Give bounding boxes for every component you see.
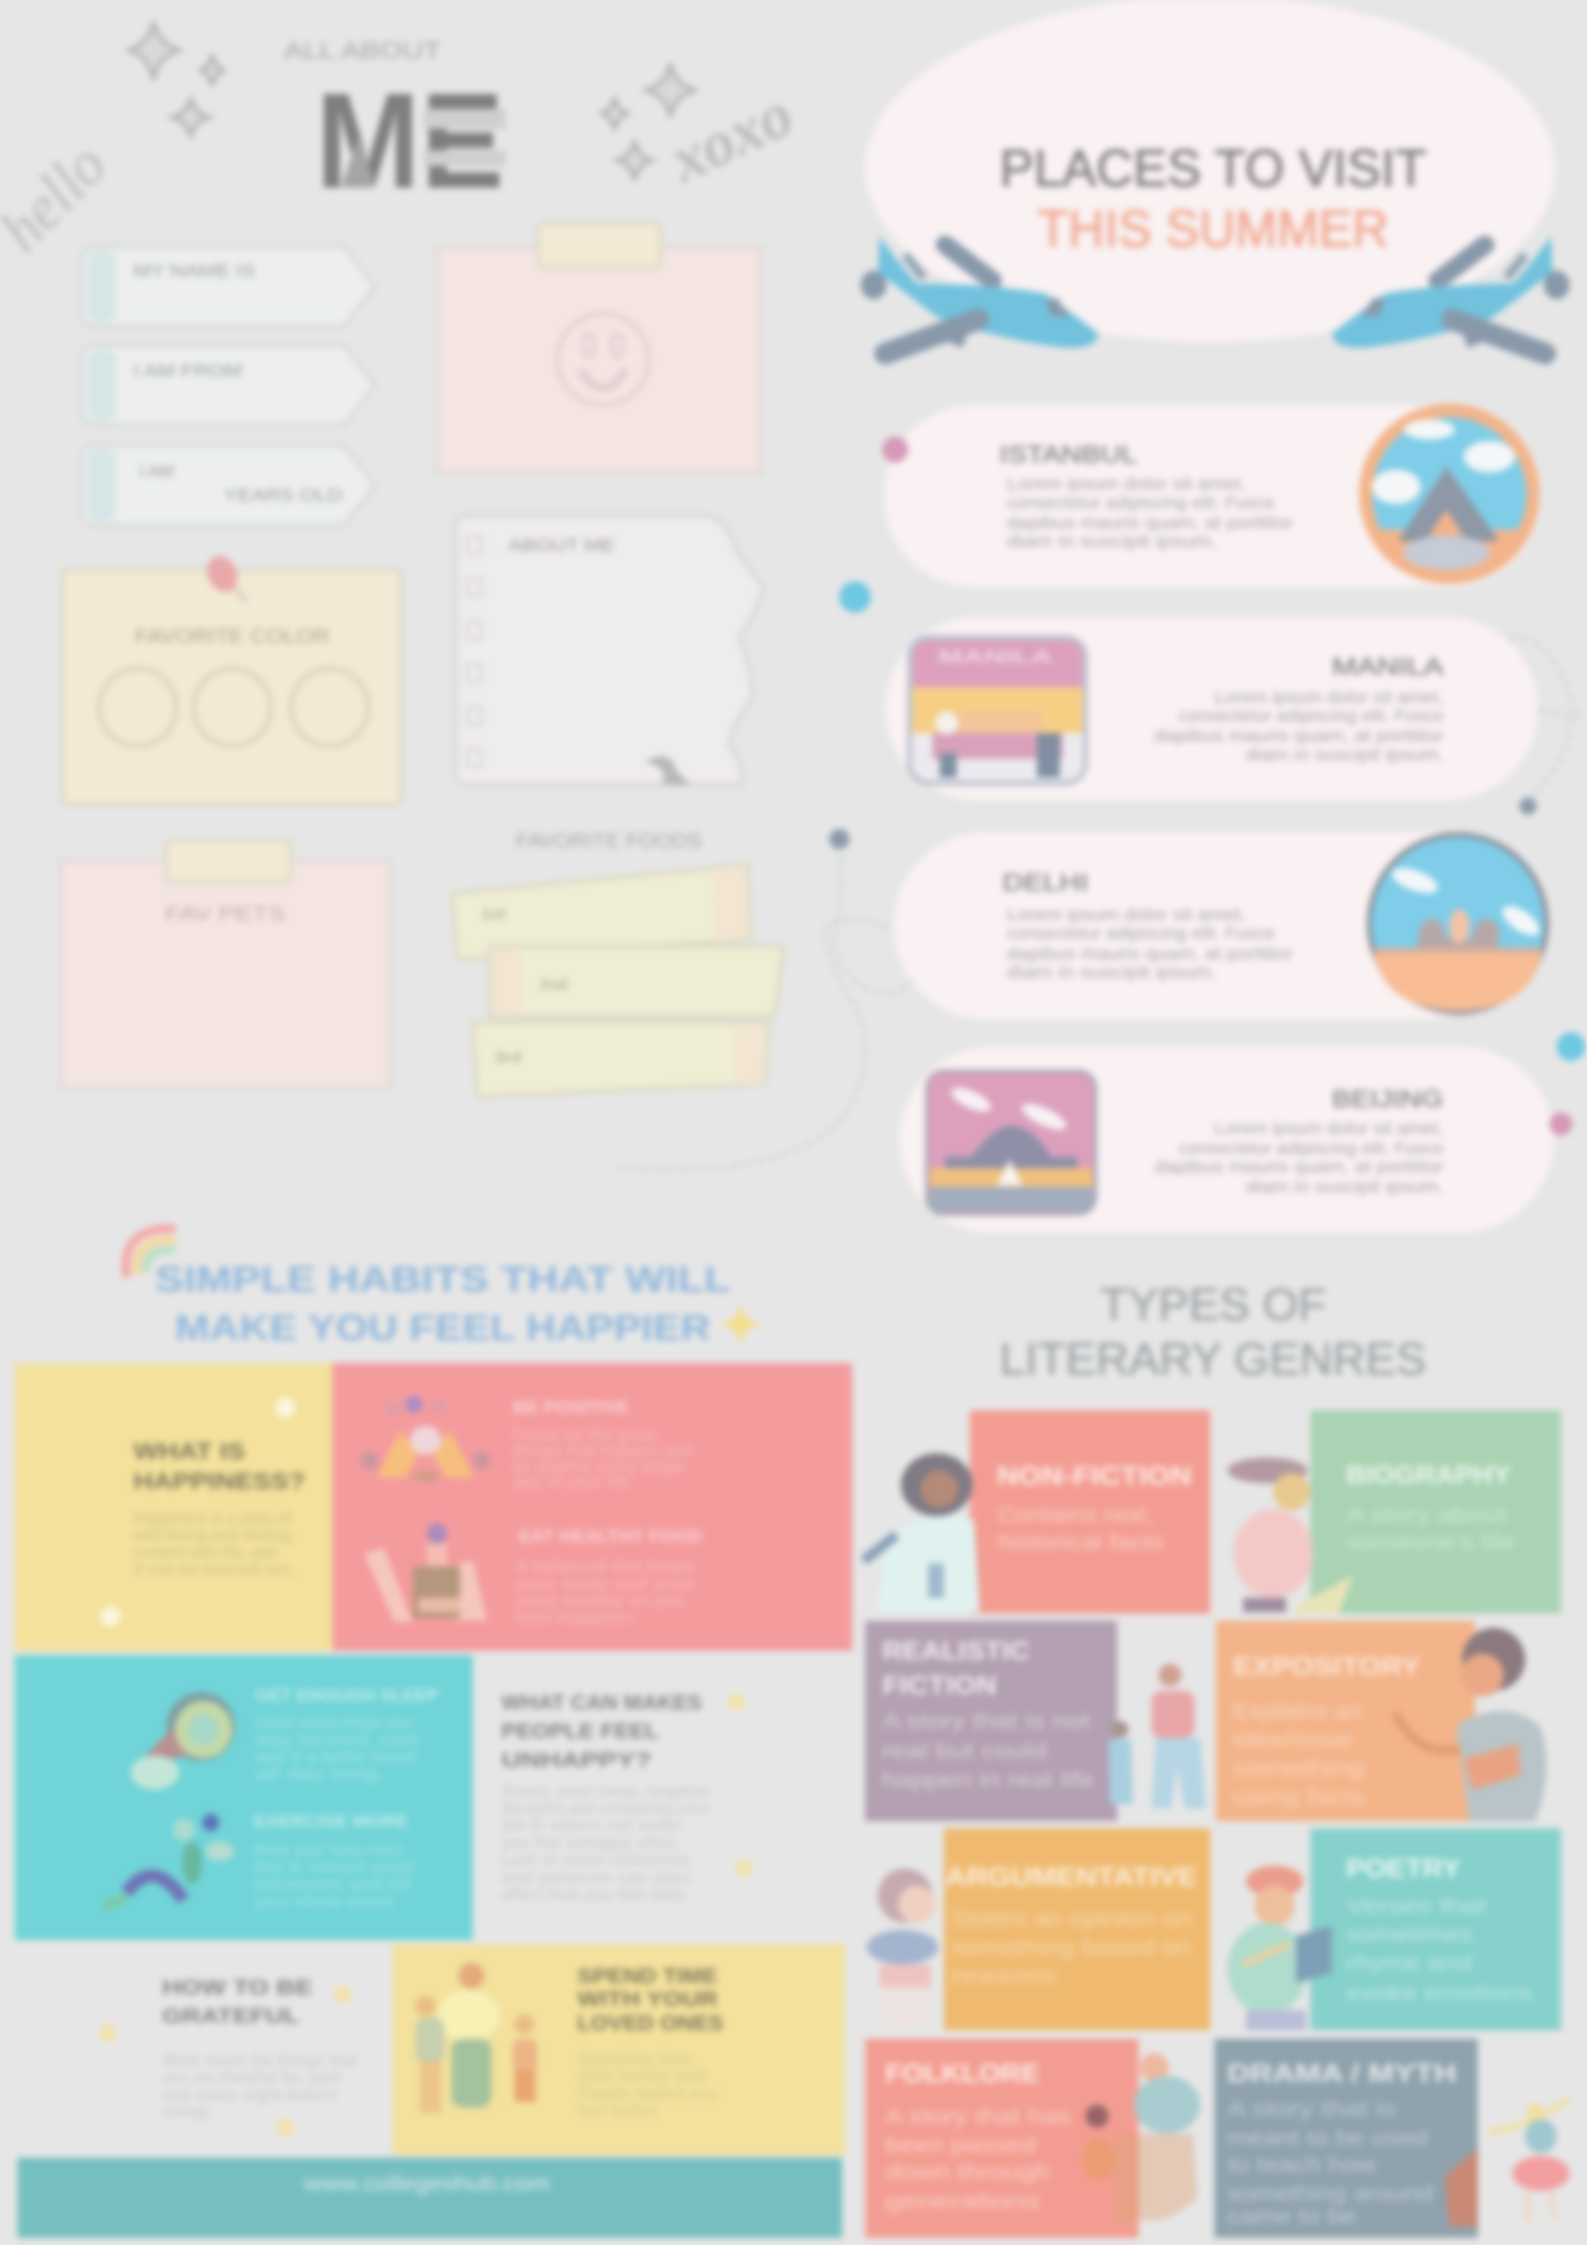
body text: Lorem ipsum dolor sit amet,: [1007, 474, 1246, 494]
panel: sleep and exercise: [15, 1655, 473, 1940]
body text: [1007, 905, 1293, 982]
body text: Lack of social connection: [501, 1850, 690, 1870]
card: folklore: [865, 2039, 1200, 2238]
icon: exercise: [103, 1814, 234, 1907]
body text: and purpose can also: [501, 1867, 690, 1887]
tag: i am from: I AM FROM: [133, 361, 242, 381]
body text: [501, 1781, 710, 1904]
card: expository: [1216, 1621, 1546, 1821]
icon: be positive: [361, 1396, 490, 1482]
card: delhi: [894, 832, 1547, 1019]
card: folklore: FOLKLORE: [885, 2060, 1040, 2088]
body text: came to be: [1227, 2205, 1356, 2229]
illustration: boy with book: [1227, 1866, 1332, 2030]
body text: States an opinion on: [951, 1907, 1192, 1931]
card: manila: MANILA: [1332, 653, 1444, 680]
icon: star: [720, 1304, 761, 1344]
colour circles: [99, 669, 368, 746]
page curl: [645, 756, 690, 785]
body text: generations: [885, 2189, 1040, 2213]
heading: simple habits: [126, 1228, 761, 1348]
tag: my name is: [82, 246, 375, 326]
body text: historical facts: [998, 1530, 1164, 1554]
card: non-fiction: [864, 1410, 1210, 1614]
body text: real but could: [882, 1739, 1047, 1763]
card: manila: [885, 617, 1538, 800]
body text: diam in suscipit ipsum.: [1246, 1177, 1444, 1197]
body text: Good sleep helps you: [255, 1712, 413, 1732]
body text: your whole mood.: [254, 1891, 397, 1911]
panel: spend time: WITH YOUR: [577, 1987, 718, 2011]
body text: mind healthy so you: [516, 1590, 685, 1610]
body text: [1346, 1503, 1515, 1554]
text block: what makes people unhappy: WHAT CAN MAKES: [501, 1691, 702, 1715]
card: beijing: BEIJING: [1332, 1086, 1444, 1113]
text block: what makes people unhappy: UNHAPPY?: [501, 1748, 652, 1772]
tickets: favorite foods: [453, 865, 783, 1097]
icon: rainbow: [126, 1228, 172, 1274]
body text: using facts: [1233, 1785, 1365, 1809]
tape: [166, 840, 291, 882]
body text: Lorem ipsum dolor sit amet,: [1214, 1118, 1444, 1138]
panel: what is happiness: WHAT IS: [133, 1438, 245, 1464]
card: non-fiction: NON-FICTION: [997, 1463, 1192, 1491]
body text: things that happen and: [513, 1440, 692, 1460]
body text: feel better.: [577, 2100, 660, 2120]
body text: [576, 2049, 718, 2120]
icon: airplane right: [1333, 236, 1570, 354]
panel: spend time: LOVED ONES: [577, 2011, 723, 2035]
body text: friends makes you: [577, 2083, 718, 2103]
panel: about me note: [456, 515, 763, 785]
body text: something: [1233, 1756, 1365, 1780]
body text: [1154, 687, 1444, 764]
icon: sleep: [131, 1692, 235, 1790]
body text: dapibus mauris quam, at porttitor: [1007, 512, 1293, 532]
body text: down through: [885, 2160, 1050, 2184]
body text: consectetur adipiscing elit. Fusce: [1179, 706, 1444, 726]
body text: well-being and feeling: [133, 1525, 291, 1545]
panel: positive and food: [332, 1363, 852, 1651]
body text: consectetur adipiscing elit. Fusce: [1179, 1138, 1444, 1158]
body text: with family and: [576, 2066, 706, 2086]
body text: [516, 1556, 695, 1628]
ticket 1: [453, 865, 751, 959]
ticket 3: 3rd: [494, 1049, 521, 1066]
panel: photo card: [437, 223, 761, 472]
card: biography: [1227, 1410, 1561, 1614]
icon: sparkles right: [602, 63, 695, 180]
scribble: xoxo: xoxo: [658, 77, 804, 197]
stars: [101, 1397, 295, 1626]
body text: [998, 1503, 1164, 1554]
body text: Stress, poor sleep, negative: [501, 1781, 710, 1801]
panel: spend time: SPEND TIME: [577, 1964, 718, 1988]
card: argumentative: [867, 1828, 1210, 2030]
body text: and in a better mood: [255, 1746, 416, 1766]
card: drama or myth: DRAMA / MYTH: [1227, 2060, 1456, 2088]
panel: about me note: ABOUT ME: [509, 535, 615, 555]
body text: your body and your: [516, 1573, 695, 1593]
card: poetry: POETRY: [1346, 1855, 1461, 1883]
body text: be grateful every single: [513, 1456, 685, 1476]
body text: A balanced diet keeps: [516, 1556, 695, 1576]
body text: thoughts and comparing your: [501, 1798, 709, 1818]
body text: Explains an: [1233, 1699, 1362, 1723]
body text: [1154, 1118, 1444, 1197]
body text: rhyme and: [1346, 1951, 1472, 1975]
panel: positive and food: BE POSITIVE: [513, 1397, 629, 1417]
icon: smiley: [557, 314, 649, 405]
ticket 2: 2nd: [540, 976, 567, 993]
heading: simple habits: SIMPLE HABITS THAT WILL: [155, 1259, 731, 1299]
heading: simple habits: MAKE YOU FEEL HAPPIER: [175, 1308, 711, 1348]
badge: manila: MANILA: [938, 646, 1053, 667]
body text: Spending time: [577, 2049, 692, 2069]
card: realistic fiction: [865, 1621, 1206, 1821]
body text: Happiness is a state of: [133, 1507, 291, 1527]
panel: favorite color: [62, 551, 401, 805]
text block: how to be grateful: GRATEFUL: [162, 2004, 300, 2028]
panel: spend time: [393, 1944, 845, 2155]
heading: types of literary genres: LITERARY GENRES: [1000, 1333, 1426, 1384]
heading: types of literary genres: TYPES OF: [1100, 1279, 1326, 1330]
body text: consectetur adipiscing elit. Fusce: [1007, 492, 1275, 512]
panel: sleep and exercise: GET ENOUGH SLEEP: [255, 1685, 438, 1705]
body text: A story that is not: [882, 1709, 1090, 1733]
body text: diam in suscipit ipsum.: [1007, 531, 1217, 551]
body text: [951, 1907, 1192, 1988]
illustration: reader: [1227, 1458, 1353, 1614]
text block: how to be grateful: [99, 1975, 357, 2136]
ticket 3: [473, 1022, 769, 1097]
badge: beijing: [927, 1071, 1096, 1214]
body text: meant to be used: [1227, 2126, 1428, 2150]
body text: Focus on the good: [513, 1424, 656, 1444]
illustration: woman pointing: [1395, 1628, 1546, 1821]
panel: fav pets: FAV PETS: [165, 904, 285, 926]
panel: favorite color: FAVORITE COLOR: [135, 626, 330, 648]
body text: Contains real,: [998, 1503, 1153, 1527]
card: biography: BIOGRAPHY: [1346, 1461, 1511, 1489]
body text: stay focused, calm: [255, 1729, 420, 1749]
card: realistic fiction: FICTION: [882, 1672, 997, 1700]
illustration: woman: [864, 1453, 980, 1612]
body text: sometimes: [1346, 1922, 1472, 1946]
body text: evoke emotions: [1346, 1981, 1532, 2005]
body text: all day long.: [255, 1764, 384, 1784]
body text: Write down the things that: [162, 2050, 357, 2070]
text block: what makes people unhappy: [501, 1691, 752, 1904]
badge: manila: [909, 637, 1086, 783]
icon: sparkles left: [129, 21, 224, 137]
body text: Lorem ipsum dolor sit amet,: [1007, 905, 1246, 925]
panel: all about me: [0, 21, 804, 265]
heading: types of literary genres: [1000, 1279, 1426, 1384]
footer bar: www.collegeshub.com: [303, 2172, 550, 2196]
ticket 1: 1st: [481, 906, 507, 923]
heading: me: ME: [315, 65, 504, 217]
body text: and every night before: [162, 2084, 337, 2104]
badge: istanbul mosque: [1359, 404, 1539, 584]
note holes: [467, 537, 481, 766]
panel: what is happiness: HAPPINESS?: [133, 1468, 305, 1494]
body text: life to others can make: [501, 1815, 680, 1835]
body text: content with life, and: [133, 1542, 277, 1562]
body text: dapibus mauris quam, at porttitor: [1154, 726, 1444, 746]
body text: to teach how: [1227, 2153, 1377, 2177]
card: istanbul: [884, 404, 1539, 587]
body text: hormones and lift: [254, 1874, 412, 1894]
body text: affect how you feel daily.: [501, 1884, 688, 1904]
body text: [882, 1709, 1094, 1792]
tag: age: YEARS OLD: [224, 485, 342, 505]
body text: something around: [1227, 2182, 1433, 2206]
body text: [255, 1712, 420, 1784]
body text: [133, 1507, 294, 1579]
badge: delhi: [1369, 835, 1547, 1012]
stars: [99, 1986, 351, 2136]
arrow: dashed flight path: [616, 637, 1587, 1170]
heading: all about: ALL ABOUT: [284, 38, 441, 65]
title: PLACES TO VISIT: [1000, 139, 1426, 197]
body text: A story that has: [885, 2104, 1071, 2128]
body text: [1007, 474, 1293, 551]
body text: [885, 2104, 1071, 2213]
panel: positive and food: EAT HEALTHY FOOD: [519, 1526, 702, 1546]
tag: age: I AM: [139, 461, 174, 481]
tag: i am from: [82, 345, 375, 425]
footer bar: [17, 2158, 842, 2238]
body text: [1227, 2097, 1433, 2229]
body text: been passed: [885, 2133, 1035, 2157]
card: realistic fiction: REALISTIC: [882, 1637, 1030, 1665]
subtitle: THIS SUMMER: [1038, 199, 1388, 257]
body text: consectetur adipiscing elit. Fusce: [1007, 923, 1275, 943]
body text: dapibus mauris quam, at porttitor: [1007, 943, 1293, 963]
icon: airplane left: [861, 236, 1098, 354]
body text: you feel unhappy often.: [501, 1832, 680, 1852]
ticket 2: [490, 946, 783, 1017]
panel: fav pets: [60, 840, 390, 1088]
body text: you are thankful for, each: [162, 2067, 342, 2087]
decorative dots: [839, 437, 1585, 1135]
tag: my name is: MY NAME IS: [133, 260, 255, 280]
icon: eat healthy: [364, 1523, 487, 1622]
heading: favorite foods: FAVORITE FOODS: [516, 831, 702, 853]
body text: sleep.: [162, 2102, 214, 2122]
body text: happen in real life: [882, 1768, 1094, 1792]
stars: [728, 1694, 752, 1877]
card: poetry: [1227, 1828, 1561, 2030]
body text: A story about: [1346, 1503, 1507, 1527]
body text: diam in suscipit ipsum.: [1246, 744, 1444, 764]
card: expository: EXPOSITORY: [1233, 1653, 1421, 1681]
body text: reasons: [951, 1964, 1057, 1988]
body text: someone's life: [1346, 1530, 1515, 1554]
card: argumentative: ARGUMENTATIVE: [945, 1864, 1197, 1892]
body text: [1233, 1699, 1365, 1809]
card: delhi: DELHI: [1003, 870, 1088, 897]
text block: what makes people unhappy: PEOPLE FEEL: [501, 1719, 659, 1743]
illustration: backpacker: [1108, 1664, 1206, 1808]
card: beijing: [899, 1047, 1554, 1233]
body text: dapibus mauris quam, at porttitor: [1154, 1157, 1444, 1177]
illustration: family: [416, 1963, 537, 2113]
body text: something based on: [951, 1935, 1192, 1959]
body text: [162, 2050, 357, 2122]
heading panel: places to visit: [865, 0, 1555, 342]
panel: what is happiness: [15, 1363, 332, 1651]
body text: it can be learned too.: [133, 1559, 294, 1579]
panel: sleep and exercise: EXERCISE MORE: [254, 1811, 408, 1831]
text block: how to be grateful: HOW TO BE: [162, 1975, 312, 1999]
body text: diam in suscipit ipsum.: [1007, 962, 1217, 982]
body text: idea/issue: [1233, 1728, 1353, 1752]
body text: Verses that: [1346, 1894, 1486, 1918]
body text: Lorem ipsum dolor sit amet,: [1214, 687, 1444, 707]
tape: [539, 223, 660, 268]
icon: pin: [201, 551, 247, 601]
body text: day of your life.: [513, 1472, 635, 1492]
body text: feel happier.: [516, 1608, 637, 1628]
card: drama or myth: [1214, 2039, 1570, 2238]
card: istanbul: ISTANBUL: [1000, 441, 1137, 468]
body text: Move your body every: [254, 1840, 404, 1860]
illustration: girl: [867, 1868, 938, 2027]
body text: [513, 1424, 692, 1492]
body text: day to release good: [254, 1857, 414, 1877]
illustration: elder and child: [1083, 2053, 1200, 2222]
tag: age: [82, 445, 375, 525]
illustration: dancing girl: [1445, 2099, 1570, 2226]
body text: [1346, 1894, 1532, 2005]
body text: A story that is: [1227, 2097, 1396, 2121]
body text: [254, 1840, 414, 1911]
